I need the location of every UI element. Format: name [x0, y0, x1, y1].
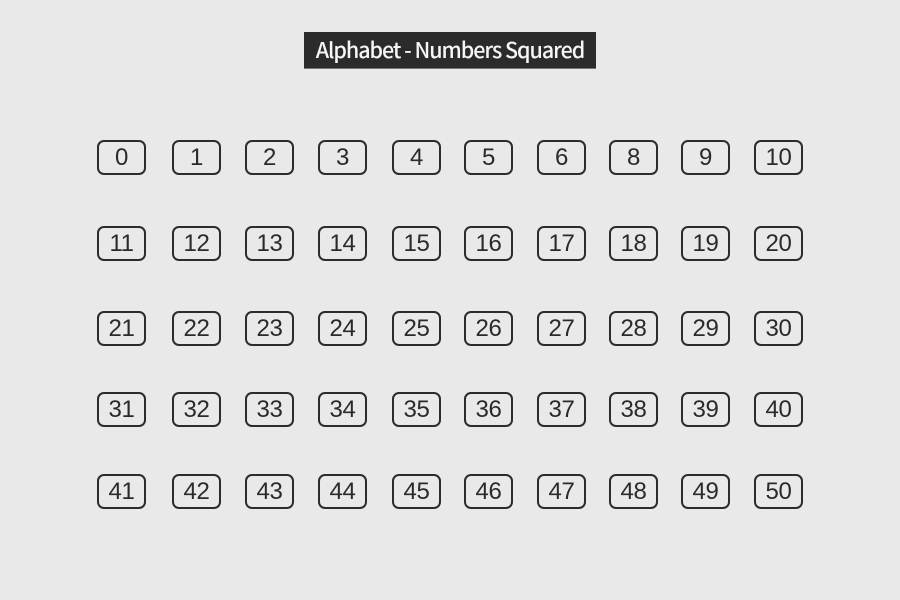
box 39: 39	[693, 396, 718, 423]
box 39	[681, 392, 730, 426]
box 29: 29	[693, 315, 718, 342]
box 41	[97, 474, 146, 508]
box 4	[392, 140, 441, 174]
box 32: 32	[184, 396, 209, 423]
box 5: 5	[482, 144, 495, 171]
box 2	[245, 140, 294, 174]
box 2: 2	[263, 144, 276, 171]
box 26: 26	[476, 315, 501, 342]
box 34	[318, 392, 367, 426]
row: 31 to 40	[97, 392, 803, 427]
box 28: 28	[621, 315, 646, 342]
box 48: 48	[621, 478, 646, 505]
box 1: 1	[190, 144, 203, 171]
box 17: 17	[549, 230, 574, 257]
box 23: 23	[257, 315, 282, 342]
box 1	[172, 140, 221, 174]
box 43	[245, 474, 294, 508]
box 16	[464, 226, 513, 260]
box 49: 49	[693, 478, 718, 505]
box 12: 12	[184, 230, 209, 257]
box 38: 38	[621, 396, 646, 423]
box 16: 16	[476, 230, 501, 257]
box 19	[681, 226, 730, 260]
box 31	[97, 392, 146, 426]
box 30: 30	[766, 315, 791, 342]
box 40: 40	[766, 396, 791, 423]
box 9: 9	[699, 144, 712, 171]
box 11: 11	[109, 230, 134, 257]
box 17	[537, 226, 586, 260]
box 19: 19	[693, 230, 718, 257]
box 11	[97, 226, 146, 260]
box 37: 37	[549, 396, 574, 423]
box 25	[392, 311, 441, 346]
box 46: 46	[476, 478, 501, 505]
box 20: 20	[766, 230, 791, 257]
box 6: 6	[555, 144, 568, 171]
box 0	[97, 140, 146, 174]
box 42: 42	[184, 478, 209, 505]
box 27: 27	[549, 315, 574, 342]
box 30	[754, 311, 803, 346]
box 8: 8	[627, 144, 640, 171]
box 9	[681, 140, 730, 174]
row: 0 to 10	[97, 140, 803, 175]
box 14: 14	[330, 230, 355, 257]
title: Alphabet - Numbers Squared	[316, 34, 584, 65]
box 4: 4	[410, 144, 423, 171]
box 0: 0	[115, 144, 128, 171]
box 36	[464, 392, 513, 426]
box 50: 50	[766, 478, 791, 505]
row: 21 to 30	[97, 311, 803, 346]
box 22	[172, 311, 221, 346]
box 33: 33	[257, 396, 282, 423]
box 45	[392, 474, 441, 508]
box 26	[464, 311, 513, 346]
box 18: 18	[621, 230, 646, 257]
box 34: 34	[330, 396, 355, 423]
box 24: 24	[330, 315, 355, 342]
box 31: 31	[109, 396, 134, 423]
box 6	[537, 140, 586, 174]
box 35	[392, 392, 441, 426]
row: 41 to 50	[97, 474, 803, 509]
box 12	[172, 226, 221, 260]
box 35: 35	[404, 396, 429, 423]
box 42	[172, 474, 221, 508]
box 13: 13	[257, 230, 282, 257]
box 46	[464, 474, 513, 508]
box 50	[754, 474, 803, 508]
box 41: 41	[109, 478, 134, 505]
box 8	[609, 140, 658, 174]
box 22: 22	[184, 315, 209, 342]
box 43: 43	[257, 478, 282, 505]
box 15: 15	[404, 230, 429, 257]
number grid	[97, 140, 803, 509]
box 47	[537, 474, 586, 508]
box 28	[609, 311, 658, 346]
box 36: 36	[476, 396, 501, 423]
box 29	[681, 311, 730, 346]
box 10: 10	[766, 144, 791, 171]
box 23	[245, 311, 294, 346]
box 37	[537, 392, 586, 426]
box 44: 44	[330, 478, 355, 505]
row: 11 to 20	[97, 226, 803, 261]
box 21	[97, 311, 146, 346]
box 3: 3	[336, 144, 349, 171]
box 44	[318, 474, 367, 508]
box 14	[318, 226, 367, 260]
box 27	[537, 311, 586, 346]
box 47: 47	[549, 478, 574, 505]
box 20	[754, 226, 803, 260]
box 38	[609, 392, 658, 426]
box 24	[318, 311, 367, 346]
box 15	[392, 226, 441, 260]
box 48	[609, 474, 658, 508]
box 45: 45	[404, 478, 429, 505]
box 5	[464, 140, 513, 174]
box 33	[245, 392, 294, 426]
box 3	[318, 140, 367, 174]
box 49	[681, 474, 730, 508]
box 10	[754, 140, 803, 174]
box 21: 21	[109, 315, 134, 342]
box 32	[172, 392, 221, 426]
box 25: 25	[404, 315, 429, 342]
box 40	[754, 392, 803, 426]
box 18	[609, 226, 658, 260]
box 13	[245, 226, 294, 260]
